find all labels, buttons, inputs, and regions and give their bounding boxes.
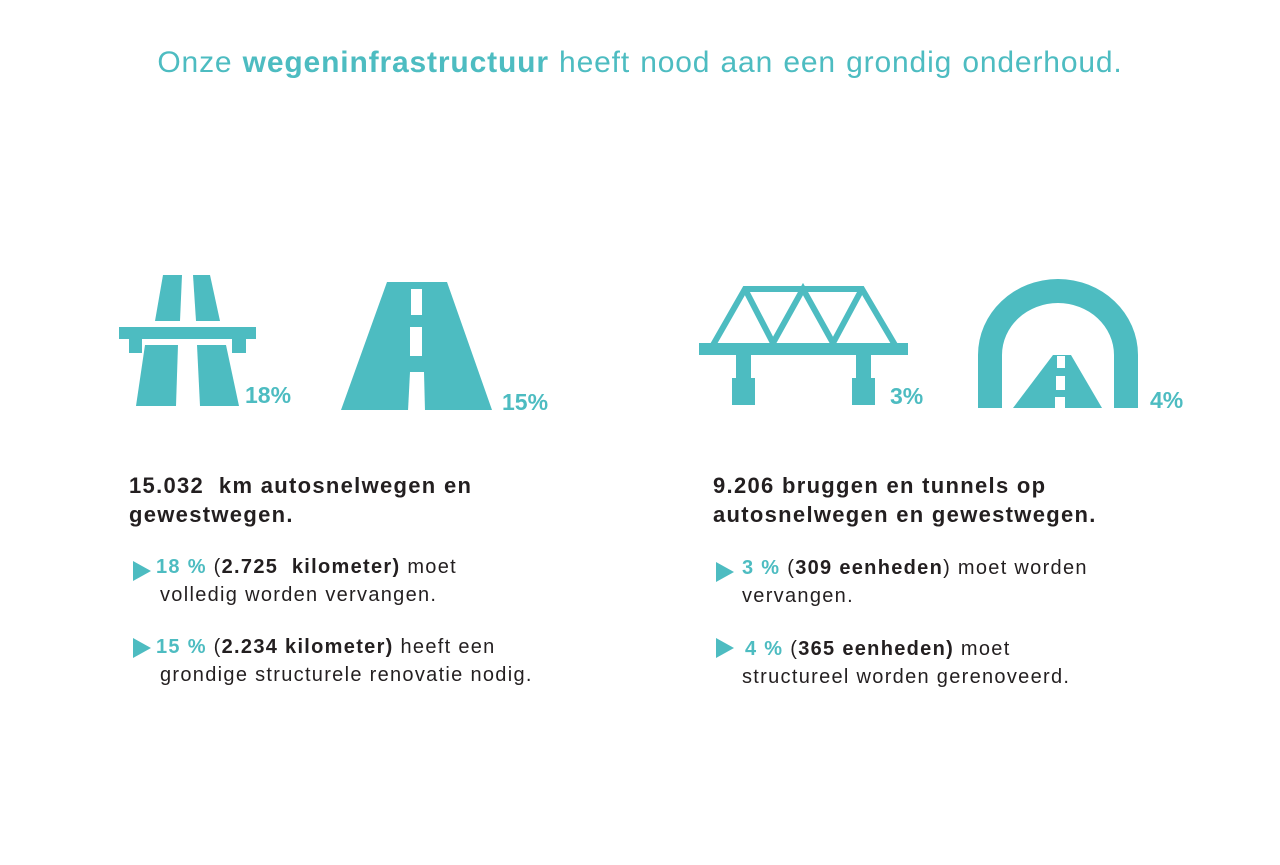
bullet: 15%	[133, 636, 533, 686]
icon: tunnel	[978, 279, 1183, 413]
bullet: 4%: 4 % (365 eenheden) moet	[745, 638, 1011, 660]
bullet: 4%: structureel worden gerenoveerd.	[742, 666, 1070, 688]
heading: bridges: 9.206 bruggen en tunnels op	[713, 473, 1046, 498]
bullet: 15%: grondige structurele renovatie nodig.	[160, 664, 533, 686]
icon: bridge	[699, 289, 923, 409]
icon: motorway	[119, 275, 291, 408]
bullet: 3%	[716, 557, 1088, 607]
icon: bridge: 3%	[890, 383, 923, 409]
icon: tunnel: 4%	[1150, 387, 1183, 413]
bullet: 18%	[133, 556, 457, 606]
heading: roads: gewestwegen.	[129, 502, 294, 527]
icon: motorway: 18%	[245, 382, 291, 408]
bullet: 3%: 3 % (309 eenheden) moet worden	[742, 557, 1088, 579]
heading: bridges	[713, 473, 1097, 527]
bullet: 15%: 15 % (2.234 kilometer) heeft een	[156, 636, 496, 658]
icon: road	[341, 282, 548, 415]
heading: bridges: autosnelwegen en gewestwegen.	[713, 502, 1097, 527]
heading: roads: 15.032 km autosnelwegen en	[129, 473, 472, 498]
bullet: 3%: vervangen.	[742, 585, 854, 607]
title: Onze wegeninfrastructuur heeft nood aan een grondig onderhoud.	[157, 46, 1123, 79]
icons graphic	[119, 275, 1183, 415]
bullet: 18%: volledig worden vervangen.	[160, 584, 437, 606]
icon: road: 15%	[502, 389, 548, 415]
bullet: 4%	[716, 638, 1070, 688]
bullet: 18%: 18 % (2.725 kilometer) moet	[156, 556, 457, 578]
heading: roads	[129, 473, 472, 527]
